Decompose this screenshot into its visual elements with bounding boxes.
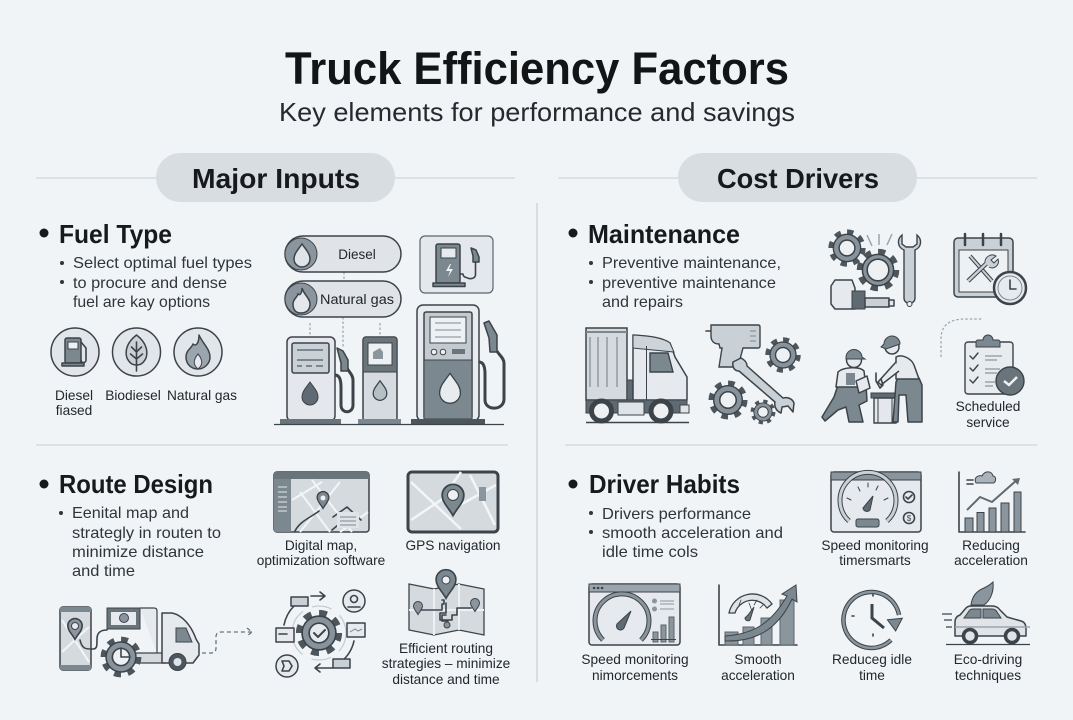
icon: fuel pumps illustration [274,305,504,424]
text: maintenance bullets: Preventive maintenance, [602,255,781,272]
text: route design bullets [59,505,221,580]
text: fuel type bullets [60,255,252,311]
text: fuel type bullets: to procure and dense [73,275,227,292]
text: fuel type bullets: Select optimal fuel types [73,255,252,272]
pill: natural gas: Natural gas [320,292,394,307]
pill: diesel [285,236,401,272]
text: maintenance bullets: preventive maintenance [602,275,776,292]
label: reducing idle time: Reduceg idle [832,652,912,667]
icon: checklist clipboard [965,335,1024,395]
pill: diesel: Diesel [338,247,376,262]
section heading: Major Inputs [156,153,395,202]
icon: biodiesel [112,328,160,376]
label: digital map: optimization software [257,553,385,568]
decorative dotted connector [941,319,983,357]
label: natural gas: Natural gas [167,388,237,403]
icon: gears and wrench [831,233,921,309]
label: speed monitoring timers: Speed monitoring [821,538,929,553]
text: maintenance bullets: and repairs [602,294,683,311]
label: diesel based: fiased [56,403,92,418]
icon: digital map window [274,472,369,532]
icon: gps navigation [408,472,498,532]
text: maintenance bullets [589,255,781,311]
section heading: Cost Drivers [678,153,917,202]
icon: optimization cycle [276,590,365,677]
heading: driver habits: Driver Habits [589,469,740,499]
heading: maintenance: Maintenance [588,219,740,249]
subtitle: Key elements for performance and savings [279,97,795,127]
icon: speed gauge window [589,584,680,645]
panel: driver habits [568,469,1030,683]
standing mechanic [876,336,922,422]
icon: calendar with tools and clock [954,234,1026,304]
icon: smooth acceleration chart [719,585,797,645]
label: diesel based: Diesel [55,388,93,403]
pump 2 [358,337,401,424]
arrow: dashed route [202,628,252,653]
icon: truck [586,328,689,422]
label: digital map: Digital map, [285,538,357,553]
label: efficient routing: distance and time [392,672,500,687]
pump 1 [280,337,353,424]
label: reducing acceleration: Reducing [962,538,1020,553]
label: efficient routing: Efficient routing [399,641,493,656]
table [871,393,899,423]
title: Truck Efficiency Factors [285,43,789,94]
label: reducing idle time: time [859,668,885,683]
label: smooth acceleration: acceleration [721,668,795,683]
pump 3 [411,305,504,424]
label: reducing acceleration: acceleration [954,553,1028,568]
label: smooth acceleration: Smooth [734,652,782,667]
icon: phone truck and gear [60,607,199,674]
icon: fuel pump card [420,236,493,293]
icon: speed monitoring window: $ [907,514,912,523]
section heading: Cost Drivers: Cost Drivers [717,163,879,194]
text: driver habits bullets: smooth acceleration and [602,525,783,542]
icon: idle clock [843,592,904,648]
icon: speed monitoring window [831,472,921,532]
panel: maintenance [568,219,1026,430]
heading: route design: Route Design [59,469,213,499]
text: route design bullets: and time [72,563,135,580]
section heading: Major Inputs: Major Inputs [192,163,360,194]
icon: natural gas [174,328,222,376]
panel: fuel type [40,219,504,424]
pill: natural gas [285,281,401,317]
label: scheduled service: Scheduled [956,399,1020,414]
text: fuel type bullets: fuel are kay options [73,294,210,311]
panel: route design [40,469,510,687]
text: driver habits bullets: idle time cols [602,544,698,561]
icon: mechanics at work [822,336,922,423]
icon: reducing acceleration chart [959,472,1025,532]
icon: diesel based [51,328,99,376]
label: biodiesel: Biodiesel [105,388,161,403]
heading: fuel type: Fuel Type [59,219,172,249]
icon: routing map [409,570,484,635]
label: speed monitoring enforcements: nimorcements [592,668,678,683]
label: efficient routing: strategies – minimize [382,656,510,671]
text: driver habits bullets: Drivers performance [602,506,751,523]
label: speed monitoring enforcements: Speed monitoring [581,652,689,667]
kneeling mechanic [822,349,870,422]
text: route design bullets: strategly in routen to [72,525,221,542]
label: gps navigation: GPS navigation [405,538,501,553]
text: route design bullets: Eenital map and [72,505,189,522]
text: driver habits bullets [589,506,783,561]
icon: drill and tools [706,325,798,422]
label: scheduled service: service [966,415,1010,430]
label: eco-driving techniques: techniques [955,668,1021,683]
label: eco-driving techniques: Eco-driving [954,652,1022,667]
label: speed monitoring timers: timersmarts [839,553,911,568]
icon: eco car [942,582,1030,644]
text: route design bullets: minimize distance [72,544,204,561]
